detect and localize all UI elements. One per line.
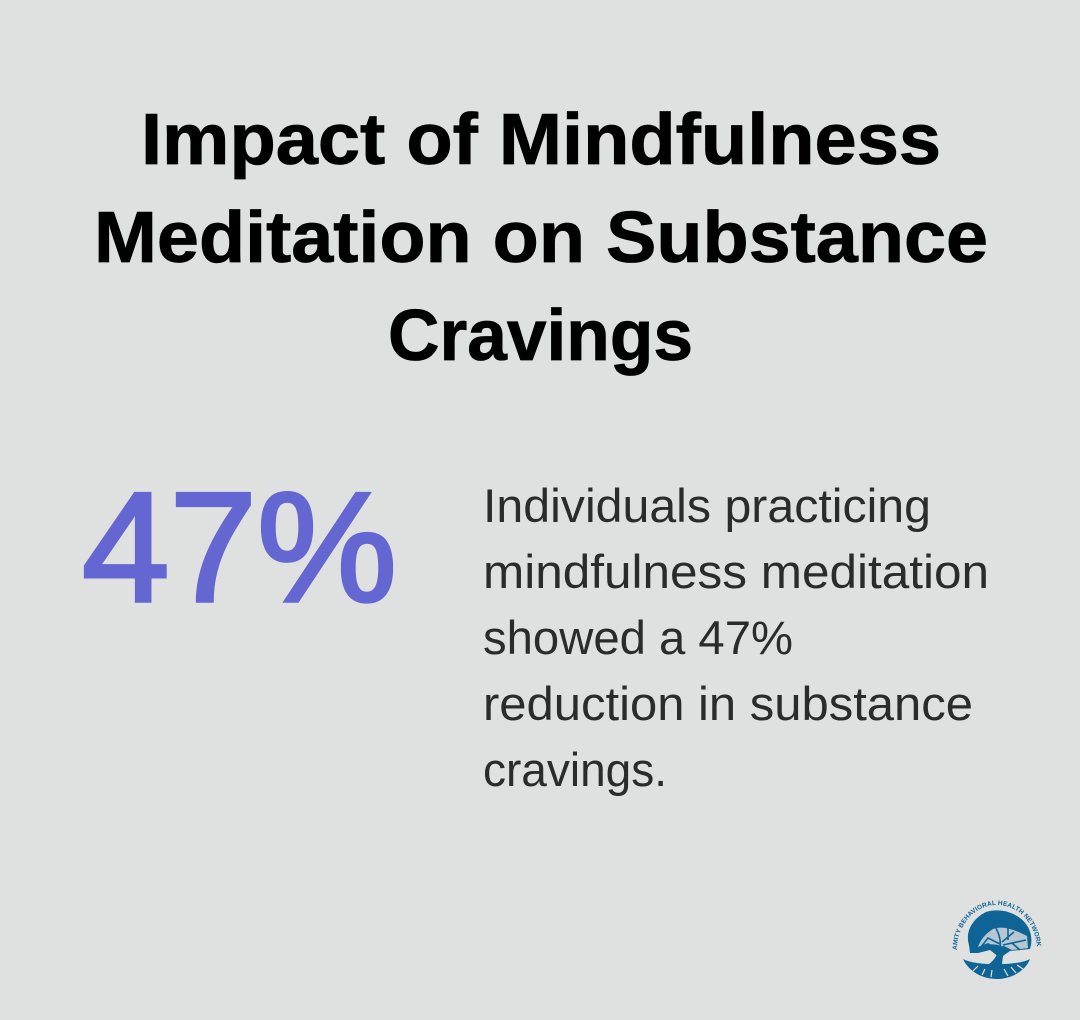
description text (483, 479, 989, 796)
title (94, 100, 988, 376)
description text: Individuals practicing (483, 479, 931, 532)
logo tree branches (981, 928, 1026, 950)
logo canopy light gaps (978, 928, 1028, 950)
title: Cravings (388, 296, 693, 376)
title: Impact of Mindfulness (141, 100, 941, 180)
title: Meditation on Substance (94, 198, 988, 278)
logo roots bowl (963, 959, 1030, 979)
big statistic: 47%: 47% (82, 461, 397, 635)
logo text: AMITY BEHAVIORAL HEALTH NETWORK (952, 900, 1042, 950)
description text: cravings. (483, 743, 667, 796)
logo root highlights (973, 965, 1023, 977)
logo trunk (975, 944, 1004, 969)
logo canopy (968, 910, 1031, 958)
description text: showed a 47% (483, 611, 793, 664)
description text: mindfulness meditation (483, 545, 989, 598)
description text: reduction in substance (483, 677, 973, 730)
logo: Amity Behavioral Health Network tree (952, 900, 1042, 979)
